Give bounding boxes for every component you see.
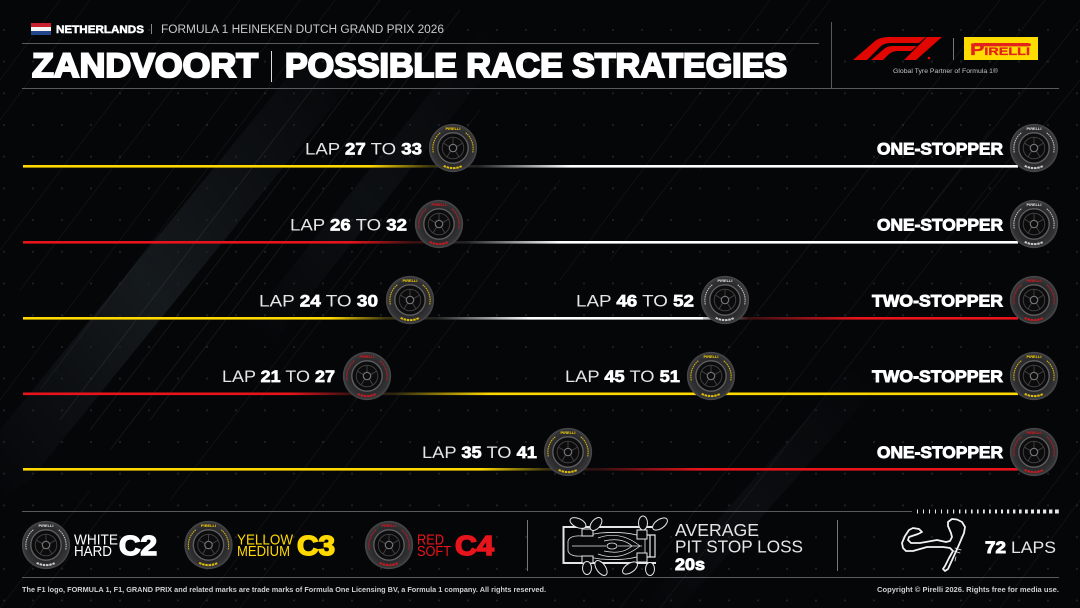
stop window: LAP 26 TO 32	[290, 216, 407, 234]
copyright notice: Copyright © Pirelli 2026. Rights free for media use.	[877, 585, 1059, 594]
legend: soft compound: SOFT	[417, 544, 451, 560]
strategy 2	[23, 200, 1058, 248]
compound code: C2	[119, 530, 157, 561]
header	[22, 22, 1059, 89]
strategy type: ONE-STOPPER	[877, 140, 1003, 158]
stint line	[23, 241, 1018, 244]
compound code: C3	[297, 530, 335, 561]
pit stop loss: 20s	[675, 555, 705, 574]
title: subject: POSSIBLE RACE STRATEGIES	[285, 47, 787, 85]
pit stop loss	[675, 520, 803, 574]
strategy type: ONE-STOPPER	[877, 443, 1003, 462]
second stop window: LAP 46 TO 52	[576, 292, 694, 310]
icon: Pirelli logo: P IRELLI	[970, 41, 1030, 59]
legend: medium compound	[184, 521, 335, 569]
title: circuit: ZANDVOORT	[32, 47, 258, 85]
icon: medium tyre	[386, 276, 434, 324]
strategy type: TWO-STOPPER	[872, 367, 1003, 386]
kicker country: NETHERLANDS	[56, 24, 144, 36]
icon: soft tyre	[1010, 276, 1058, 324]
stint line: hard to soft	[703, 317, 1018, 320]
icon: soft tyre	[1010, 428, 1058, 476]
legend: soft compound	[365, 521, 495, 569]
strategy 3	[23, 276, 1058, 324]
icon: pit stop diagram	[564, 515, 670, 578]
first stop window: LAP 24 TO 30	[259, 292, 378, 310]
pit stop loss: AVERAGE	[675, 520, 759, 540]
icon: medium tyre	[1010, 352, 1058, 400]
icon: soft tyre	[343, 352, 391, 400]
lap tick scale	[917, 510, 1059, 514]
partner caption: Global Tyre Partner of Formula 1®	[893, 67, 998, 75]
icon: F1 logo	[853, 37, 942, 60]
stint line	[23, 165, 1018, 168]
icon: medium tyre	[544, 428, 592, 476]
stint line: medium to hard	[23, 317, 703, 320]
compound name: WHITE	[74, 532, 118, 548]
icon: Netherlands flag	[31, 23, 51, 35]
stop window: LAP 27 TO 33	[305, 140, 422, 158]
kicker race name: FORMULA 1 HEINEKEN DUTCH GRAND PRIX 2026	[161, 24, 444, 36]
strategy type: TWO-STOPPER	[872, 292, 1003, 310]
legend: hard compound: HARD	[74, 544, 112, 560]
strategy 4	[23, 352, 1058, 400]
laps	[985, 539, 1056, 557]
stint line	[23, 392, 1018, 395]
icon: medium tyre	[429, 124, 477, 172]
laps: 72	[985, 539, 1006, 557]
strategy 5	[23, 428, 1058, 476]
compound code: C4	[455, 530, 495, 561]
pit stop loss: PIT STOP LOSS	[675, 536, 803, 556]
compound name: RED	[417, 532, 444, 548]
stop window: LAP 35 TO 41	[422, 443, 537, 462]
trademark notice: The F1 logo, FORMULA 1, F1, GRAND PRIX and related marks are trade marks of Formula One Licensing BV, a Formula 1 company. All rights reserved.	[22, 585, 546, 594]
second stop window: LAP 45 TO 51	[565, 367, 680, 386]
icon: hard tyre	[22, 521, 70, 569]
first stop window: LAP 21 TO 27	[222, 367, 335, 386]
laps: LAPS	[1011, 539, 1056, 557]
legend: hard compound	[22, 521, 157, 569]
strategy 1	[23, 124, 1058, 172]
logos	[853, 37, 1038, 75]
icon: circuit map	[902, 519, 965, 571]
icon: medium tyre	[184, 521, 233, 569]
compound name: YELLOW	[237, 532, 293, 548]
icon: Pirelli logo	[964, 37, 1038, 60]
legend: medium compound: MEDIUM	[237, 544, 290, 560]
stint line	[23, 468, 1018, 471]
icon: medium tyre	[687, 352, 735, 400]
icon: soft tyre	[415, 200, 463, 248]
strategy type: ONE-STOPPER	[877, 216, 1003, 234]
icon: soft tyre	[365, 521, 413, 569]
icon: hard tyre	[701, 276, 749, 324]
icon: hard tyre	[1010, 200, 1058, 248]
icon: hard tyre	[1010, 124, 1058, 172]
